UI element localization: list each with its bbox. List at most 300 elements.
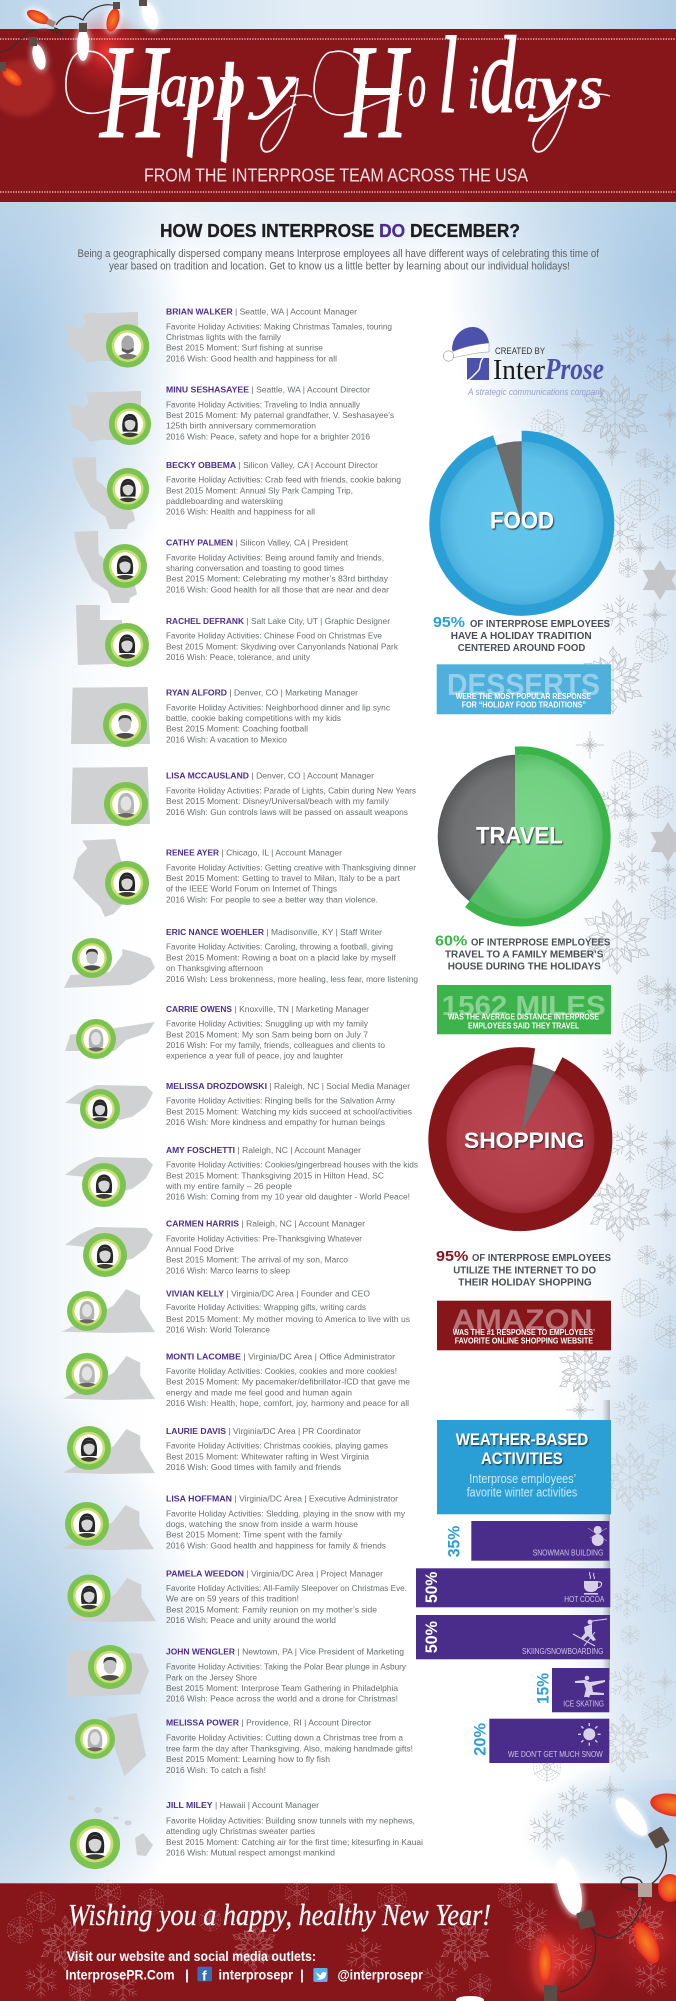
state map: Virginia xyxy=(63,1356,155,1400)
title: Happy Holidays: d xyxy=(480,14,517,136)
details: Best 2015 Moment: My son Sam being born on July 7 xyxy=(166,1029,368,1039)
details: on Thanksgiving afternoon xyxy=(166,963,263,973)
statistic text xyxy=(435,932,610,972)
statistic text xyxy=(433,614,610,654)
title: Happy Holidays xyxy=(66,14,610,167)
footer links: interprosepr xyxy=(218,1966,293,1982)
details xyxy=(166,321,392,363)
statistic text: OF INTERPROSE EMPLOYEES xyxy=(471,936,610,948)
details xyxy=(166,1815,423,1857)
team member: Minu Seshasayee xyxy=(66,385,394,445)
details xyxy=(166,862,416,904)
details: Best 2015 Moment: My paternal grandfather, V. Seshasayee’s xyxy=(166,410,394,420)
name line: RENEE AYER xyxy=(166,848,220,858)
state map: North Carolina xyxy=(65,1227,153,1262)
details: 2016 Wish: Health, hope, comfort, joy, harmony and peace for all xyxy=(166,1398,409,1408)
portrait: Becky Obbema xyxy=(107,468,149,510)
pie chart: food 95% xyxy=(435,430,609,610)
team member: Renee Ayer xyxy=(73,839,416,917)
details xyxy=(166,942,418,984)
team member: Laurie Davis xyxy=(63,1426,388,1474)
portrait: John Wengler xyxy=(88,1645,132,1689)
details: Best 2015 Moment: Celebrating my mother’s 83rd birthday xyxy=(166,574,389,584)
footer links: | xyxy=(300,1966,304,1982)
details: dogs, watching the snow from inside a warm house xyxy=(166,1519,358,1529)
bar: hot cocoa 50%: HOT COCOA xyxy=(564,1594,605,1604)
footer greeting: Wishing you a happy, healthy New Year! xyxy=(68,1897,491,1932)
details xyxy=(166,702,391,745)
title: Happy Holidays: i xyxy=(468,54,479,122)
details: Best 2015 Moment: Disney/Universal/beach with my family xyxy=(166,796,390,806)
name line: | Knoxville, TN | Marketing Manager xyxy=(234,1004,369,1014)
name line: | Newtown, PA | Vice President of Marketing xyxy=(238,1647,404,1657)
name line: RACHEL DEFRANK xyxy=(166,616,245,626)
details: Best 2015 Moment: Coaching football xyxy=(166,724,308,734)
name line: | Raleigh, NC | Social Media Manager xyxy=(270,1081,410,1091)
details: Best 2015 Moment: Getting to travel to Milan, Italy to be a part xyxy=(166,873,401,883)
name line xyxy=(166,1568,383,1578)
name line: | Virginia/DC Area | Founder and CEO xyxy=(226,1288,370,1298)
name line xyxy=(166,1647,404,1657)
state map: Washington xyxy=(63,312,138,363)
portrait: Brian Walker xyxy=(106,324,149,368)
details: Favorite Holiday Activities: Neighborhood dinner and lip sync xyxy=(166,702,391,712)
bulbs xyxy=(0,0,164,89)
bar: snowman building 35% xyxy=(444,1521,609,1561)
team member: Rachel DeFrank xyxy=(76,605,399,667)
details: Best 2015 Moment: Rowing a boat on a placid lake by myself xyxy=(166,952,396,962)
panel: food xyxy=(433,430,611,714)
footer links xyxy=(66,1949,423,1984)
state map: Kentucky xyxy=(64,949,155,988)
state map: Colorado xyxy=(71,767,150,824)
name line xyxy=(166,1351,395,1361)
details: Favorite Holiday Activities: Chinese Food on Christmas Eve xyxy=(166,631,382,641)
name line: | Providence, RI | Account Director xyxy=(242,1718,371,1728)
team member: Carrie Owens xyxy=(65,1004,385,1061)
team member: Jill Miley xyxy=(68,1796,423,1869)
statistic text: HOUSE DURING THE HOLIDAYS xyxy=(448,960,601,972)
callout: amazon: WAS THE #1 RESPONSE TO EMPLOYEES’ xyxy=(453,1328,595,1337)
icon: sun xyxy=(578,1723,601,1746)
logo: created by InterProse: A strategic communications company xyxy=(467,387,604,397)
name line xyxy=(166,927,382,937)
logo: created by InterProse xyxy=(443,327,604,397)
intro text: year based on tradition and location. Get to know us a little better by learning about our individual holidays! xyxy=(109,260,570,272)
details: 2016 Wish: Coming from my 10 year old daughter - World Peace! xyxy=(166,1192,410,1202)
portrait: Rachel DeFrank xyxy=(105,623,149,667)
name line: MELISSA POWER xyxy=(166,1718,240,1728)
details xyxy=(166,552,389,594)
panel: travel xyxy=(435,750,611,1034)
bar: ice skating 15%: ICE SKATING xyxy=(563,1699,604,1709)
details xyxy=(166,399,394,441)
name line: CARMEN HARRIS xyxy=(166,1219,239,1229)
portrait: Renee Ayer xyxy=(105,861,149,905)
details: 2016 Wish: Peace, tolerance, and unity xyxy=(166,652,311,662)
bar: we don't get much snow 20%: WE DON’T GET MUCH SNOW xyxy=(508,1749,603,1759)
details: Favorite Holiday Activities: Traveling to India annually xyxy=(166,399,361,409)
name line xyxy=(166,1219,365,1229)
name line xyxy=(166,1800,319,1810)
intro text: Being a geographically dispersed company means Interprose employees all have different ways of celebrating this time of xyxy=(78,248,600,260)
details xyxy=(166,1019,385,1061)
state map: North Carolina xyxy=(65,1085,153,1120)
details: Best 2015 Moment: Whitewater rafting in West Virginia xyxy=(166,1451,369,1461)
details: Best 2015 Moment: Learning how to fly fish xyxy=(166,1754,330,1764)
name line: JOHN WENGLER xyxy=(166,1647,236,1657)
title: Happy Holidays: s xyxy=(578,54,603,122)
details xyxy=(166,1583,407,1625)
icon: skater xyxy=(575,1676,605,1698)
bar: ice skating 15%: 15% xyxy=(534,1673,552,1704)
name line xyxy=(166,1718,371,1728)
name line: | Denver, CO | Marketing Manager xyxy=(230,688,358,698)
icon: cup xyxy=(584,1572,602,1595)
string lights bottom-right xyxy=(456,1790,676,2001)
title swashes xyxy=(66,51,610,163)
callout: desserts: DESSERTS xyxy=(447,667,600,702)
portrait: Melissa Power xyxy=(75,1719,115,1759)
details: Best 2015 Moment: Annual Sly Park Camping Trip, xyxy=(166,485,353,495)
portrait: Eric Nance Woehler xyxy=(72,938,112,978)
details: Annual Food Drive xyxy=(166,1244,234,1254)
portrait: Carrie Owens xyxy=(76,1019,116,1059)
bar: snowman building 35%: SNOWMAN BUILDING xyxy=(533,1548,603,1558)
title: Happy Holidays: l xyxy=(438,14,458,136)
name line: CATHY PALMEN xyxy=(166,538,233,548)
name line: | Madisonville, KY | Staff Writer xyxy=(266,927,382,937)
footer links: InterprosePR.Com xyxy=(66,1966,174,1982)
details: 2016 Wish: To catch a fish! xyxy=(166,1765,266,1775)
portrait: Lisa Hoffman xyxy=(65,1502,109,1546)
state map: California xyxy=(74,531,137,603)
statistic text: 95% xyxy=(433,614,465,631)
name line: PAMELA WEEDON xyxy=(166,1568,244,1578)
name line: MONTI LACOMBE xyxy=(166,1351,241,1361)
name line xyxy=(166,1004,369,1014)
details: Favorite Holiday Activities: Being around family and friends, xyxy=(166,552,384,562)
details: attending ugly Christmas sweater parties xyxy=(166,1826,315,1836)
portrait: Lisa McCausland xyxy=(104,782,148,826)
title: Happy Holidays: a xyxy=(160,52,188,120)
details: energy and made me feel good and human again xyxy=(166,1387,352,1397)
name line: | Virginia/DC Area | PR Coordinator xyxy=(228,1426,361,1436)
title: Happy Holidays: a xyxy=(514,54,538,122)
name line: | Virginia/DC Area | Office Administrator xyxy=(244,1351,395,1361)
team member: Melissa Drozdowski xyxy=(65,1081,412,1129)
details: 2016 Wish: Peace, safety and hope for a brighter 2016 xyxy=(166,431,370,441)
snowflakes right side xyxy=(527,325,676,1879)
heading box: favorite winter activities xyxy=(467,1486,577,1500)
team member: Vivian Kelly xyxy=(62,1288,410,1335)
logo: created by InterProse: Inter xyxy=(493,354,545,386)
name line: | Hawaii | Account Manager xyxy=(215,1800,319,1810)
name line xyxy=(166,771,374,781)
name line: VIVIAN KELLY xyxy=(166,1288,224,1298)
details: paddleboarding and waterskiing xyxy=(166,496,283,506)
portrait: Melissa Drozdowski xyxy=(80,1089,120,1129)
team member: Becky Obbema xyxy=(72,457,401,529)
name line xyxy=(166,460,378,470)
details: Favorite Holiday Activities: Taking the Polar Bear plunge in Asbury xyxy=(166,1662,407,1672)
bar: skiing/snowboarding 50%: 50% xyxy=(422,1621,441,1653)
icon: santa hat xyxy=(443,327,489,361)
intro text xyxy=(78,248,600,272)
details xyxy=(166,1366,410,1408)
right edge panel shading xyxy=(602,1400,676,1780)
details: Favorite Holiday Activities: Cookies, cookies and more cookies! xyxy=(166,1366,397,1376)
team member: Carmen Harris xyxy=(65,1219,365,1277)
portrait: Laurie Davis xyxy=(67,1426,111,1470)
name line xyxy=(166,538,349,548)
details xyxy=(166,631,399,662)
name line: | Chicago, IL | Account Manager xyxy=(222,848,342,858)
name line xyxy=(166,616,390,626)
statistic text: TRAVEL TO A FAMILY MEMBER’S xyxy=(445,948,603,960)
details: 2016 Wish: Less brokenness, more healing, less fear, more listening xyxy=(166,974,418,984)
name line: | Raleigh, NC | Account Manager xyxy=(238,1145,361,1155)
details: Favorite Holiday Activities: Christmas cookies, playing games xyxy=(166,1441,388,1451)
icon: twitter xyxy=(313,1968,328,1982)
details: Favorite Holiday Activities: Making Christmas Tamales, touring xyxy=(166,321,392,331)
title: Happy Holidays: o xyxy=(408,52,426,120)
name line xyxy=(166,1081,410,1091)
portrait: Ryan Alford xyxy=(103,703,147,747)
details: Favorite Holiday Activities: All-Family Sleepover on Christmas Eve. xyxy=(166,1583,407,1593)
bar: hot cocoa 50% xyxy=(416,1568,610,1607)
details: Favorite Holiday Activities: Cutting down a Christmas tree from a xyxy=(166,1733,403,1743)
team member: Cathy Palmen xyxy=(74,531,389,603)
details: Favorite Holiday Activities: Sledding, playing in the snow with my xyxy=(166,1508,406,1518)
portrait: Pamela Weedon xyxy=(67,1574,111,1618)
team member: John Wengler xyxy=(67,1645,407,1704)
details: Favorite Holiday Activities: Caroling, throwing a football, giving xyxy=(166,942,393,952)
callout: amazon: AMAZON xyxy=(452,1304,593,1336)
title: Happy Holidays: p xyxy=(183,52,215,120)
details: 2016 Wish: For my family, friends, colleagues and clients to xyxy=(166,1040,385,1050)
details xyxy=(166,1508,406,1550)
team member: Lisa McCausland xyxy=(71,767,416,826)
callout: desserts: FOR “HOLIDAY FOOD TRADITIONS” xyxy=(462,701,586,710)
heading box: Interprose employees’ xyxy=(469,1472,576,1486)
name line: | Denver, CO | Account Manager xyxy=(252,771,374,781)
details: Favorite Holiday Activities: Pre-Thanksgiving Whatever xyxy=(166,1233,362,1243)
details: Favorite Holiday Activities: Cookies/gingerbread houses with the kids xyxy=(166,1160,418,1170)
details xyxy=(166,475,401,517)
footer links: @interprosepr xyxy=(338,1966,423,1982)
name line: BECKY OBBEMA xyxy=(166,460,236,470)
details: Favorite Holiday Activities: Building snow tunnels with my nephews, xyxy=(166,1815,415,1825)
title: Happy Holidays: H xyxy=(344,18,411,167)
details xyxy=(166,1302,410,1335)
details: Best 2015 Moment: Interprose Team Gathering in Philadelphia xyxy=(166,1683,398,1693)
details: Park on the Jersey Shore xyxy=(166,1672,257,1682)
details: 2016 Wish: Peace across the world and a drone for Christmas! xyxy=(166,1694,398,1704)
details: Christmas lights with the family xyxy=(166,332,282,342)
title: Happy Holidays: H xyxy=(99,18,170,167)
footer links: | xyxy=(185,1966,189,1982)
name line: | Silicon Valley, CA | President xyxy=(236,538,349,548)
team member: Eric Nance Woehler xyxy=(64,927,418,988)
portrait: Jill Miley xyxy=(70,1819,120,1869)
name line: CARRIE OWENS xyxy=(166,1004,232,1014)
team member: Amy Foschetti xyxy=(65,1145,418,1207)
details: Best 2015 Moment: Catching air for the first time; kitesurfing in Kauai xyxy=(166,1837,423,1847)
panel: weather-based activities xyxy=(416,1420,611,1763)
statistic text: CENTERED AROUND FOOD xyxy=(458,642,586,654)
details: Favorite Holiday Activities: Parade of Lights, Cabin during New Years xyxy=(166,785,416,795)
details: experience a year full of peace, joy and laughter xyxy=(166,1051,343,1061)
details xyxy=(166,785,416,817)
details xyxy=(165,1160,418,1202)
name line: AMY FOSCHETTI xyxy=(166,1145,235,1155)
name line: ERIC NANCE WOEHLER xyxy=(166,927,265,937)
pie chart: travel 60% xyxy=(438,750,607,922)
team member: Ryan Alford xyxy=(71,687,391,747)
bar: we don't get much snow 20% xyxy=(470,1719,609,1763)
statistic text: UTILIZE THE INTERNET TO DO xyxy=(453,1264,596,1276)
name line xyxy=(166,307,357,317)
callout: amazon xyxy=(437,1301,611,1350)
state map: North Carolina xyxy=(65,1157,153,1192)
callout: 1562 miles: EMPLOYEES SAID THEY TRAVEL xyxy=(468,1021,579,1030)
footer band xyxy=(0,1879,676,2001)
details: 2016 Wish: Good times with family and friends xyxy=(166,1462,341,1472)
name line xyxy=(166,688,358,698)
details: of the IEEE World Forum on Internet of Things xyxy=(166,884,337,894)
details: with my entire family – 26 people xyxy=(165,1181,292,1191)
details: 2016 Wish: Mutual respect amongst mankind xyxy=(166,1847,335,1857)
portrait: Amy Foschetti xyxy=(82,1163,126,1207)
tagline: FROM THE INTERPROSE TEAM ACROSS THE USA xyxy=(144,166,528,186)
heading: HOW DOES INTERPROSE DO DECEMBER? xyxy=(160,220,520,241)
callout: 1562 miles: 1562 MILES xyxy=(442,990,606,1021)
statistic text: 95% xyxy=(436,1248,468,1265)
state map: Virginia xyxy=(62,1289,155,1333)
details: Favorite Holiday Activities: Wrapping gifts, writing cards xyxy=(166,1302,366,1312)
state map: Washington xyxy=(66,391,141,442)
bar: snowman building 35%: 35% xyxy=(444,1526,464,1557)
name line: | Raleigh, NC | Account Manager xyxy=(242,1219,365,1229)
bar: skiing/snowboarding 50%: SKIING/SNOWBOARDING xyxy=(522,1646,603,1656)
state map: Tennessee xyxy=(65,1022,155,1051)
details: Best 2015 Moment: My pacemaker/defibrillator-ICD that gave me xyxy=(166,1377,410,1387)
logo: created by InterProse: CREATED BY xyxy=(495,346,545,356)
title: Happy Holidays: y xyxy=(527,54,577,122)
details: 2016 Wish: More kindness and empathy for human beings xyxy=(166,1117,385,1127)
details xyxy=(166,1233,362,1275)
details: battle, cookie baking competitions with my kids xyxy=(166,713,341,723)
portrait: Minu Seshasayee xyxy=(109,403,151,445)
bulbs xyxy=(456,1790,676,2001)
details: 2016 Wish: Peace and unity around the world xyxy=(166,1615,336,1625)
statistic text: HAVE A HOLIDAY TRADITION xyxy=(451,630,592,642)
details xyxy=(166,1662,407,1704)
name line: LISA HOFFMAN xyxy=(166,1494,232,1504)
state map: Virginia xyxy=(64,1578,156,1622)
title: Happy Holidays: y xyxy=(247,52,297,120)
footer links: Visit our website and social media outlets: xyxy=(67,1949,316,1964)
team member: Pamela Weedon xyxy=(64,1568,407,1625)
name line: | Salt Lake City, UT | Graphic Designer xyxy=(246,616,390,626)
state map: Rhode Island xyxy=(107,1713,146,1776)
bar: hot cocoa 50%: 50% xyxy=(422,1572,441,1603)
details: 2016 Wish: Good health and happiness for all xyxy=(166,353,337,363)
details: Best 2015 Moment: Family reunion on my mother’s side xyxy=(166,1604,377,1614)
details: Best 2015 Moment: Skydiving over Canyonlands National Park xyxy=(166,641,399,651)
statistic text: OF INTERPROSE EMPLOYEES xyxy=(472,1252,611,1264)
panel: shopping xyxy=(436,1056,611,1350)
details: Best 2015 Moment: Thanksgiving 2015 in Hilton Head, SC xyxy=(166,1170,384,1180)
name line: LAURIE DAVIS xyxy=(166,1426,226,1436)
callout: desserts xyxy=(437,664,611,714)
state map: Illinois xyxy=(73,839,130,917)
details: 2016 Wish: For people to see a better way than violence. xyxy=(166,894,378,904)
name line: | Seattle, WA | Account Director xyxy=(252,385,370,395)
logo: created by InterProse: Prose xyxy=(544,351,604,386)
icon: skier xyxy=(573,1619,607,1646)
name line xyxy=(166,848,342,858)
name line xyxy=(166,385,370,395)
name line: | Virginia/DC Area | Project Manager xyxy=(246,1568,383,1578)
icon: InterProse square xyxy=(464,358,489,382)
details: Favorite Holiday Activities: Snuggling up with my family xyxy=(166,1019,369,1029)
details: 2016 Wish: Good health and happiness for family & friends xyxy=(166,1540,386,1550)
name line xyxy=(166,1426,361,1436)
name line: | Seattle, WA | Account Manager xyxy=(235,307,357,317)
details: 125th birth anniversary commemoration xyxy=(166,421,316,431)
name line: JILL MILEY xyxy=(166,1800,213,1810)
details: Best 2015 Moment: Surf fishing at sunrise xyxy=(166,343,323,353)
solid snowflakes xyxy=(640,560,676,862)
statistic text: 60% xyxy=(435,932,467,950)
callout: desserts: WERE THE MOST POPULAR RESPONSE xyxy=(456,692,592,701)
callout: 1562 miles: WAS THE AVERAGE DISTANCE INTERPROSE xyxy=(448,1013,600,1022)
details: Best 2015 Moment: Time spent with the family xyxy=(166,1530,343,1540)
pie label: SHOPPING xyxy=(464,1128,584,1153)
state map: Utah xyxy=(76,605,122,665)
details xyxy=(166,1441,388,1472)
bar: skiing/snowboarding 50% xyxy=(416,1615,610,1659)
name line: | Virginia/DC Area | Executive Administrator xyxy=(234,1494,398,1504)
state map: Hawaii xyxy=(68,1796,153,1856)
header band xyxy=(0,10,676,202)
details: Favorite Holiday Activities: Crab feed with friends, cookie baking xyxy=(166,475,401,485)
name line: MINU SESHASAYEE xyxy=(166,385,249,395)
name line: MELISSA DROZDOWSKI xyxy=(166,1081,267,1091)
bar: ice skating 15% xyxy=(534,1668,609,1712)
details: 2016 Wish: Marco learns to sleep xyxy=(166,1265,290,1275)
title: Happy Holidays: p xyxy=(213,52,245,120)
name line xyxy=(166,1145,361,1155)
icon: facebook: f xyxy=(202,1968,207,1984)
state map: California xyxy=(72,457,135,529)
details: tree farm the day after Thanksgiving. Also, making handmade gifts! xyxy=(166,1743,413,1753)
callout: 1562 miles xyxy=(437,985,611,1034)
icon: facebook xyxy=(197,1967,212,1984)
team member: Monti Lacombe xyxy=(63,1351,410,1408)
details: Favorite Holiday Activities: Ringing bells for the Salvation Army xyxy=(166,1096,396,1106)
details: We are on 59 years of this tradition! xyxy=(166,1594,299,1604)
pie label: TRAVEL xyxy=(476,822,563,850)
details: Best 2015 Moment: The arrival of my son, Marco xyxy=(166,1255,348,1265)
name line: BRIAN WALKER xyxy=(166,307,233,317)
details: 2016 Wish: Health and happiness for all xyxy=(166,507,315,517)
portrait: Carmen Harris xyxy=(83,1233,127,1277)
team member: Brian Walker xyxy=(63,307,392,368)
state map: Virginia xyxy=(62,1505,154,1550)
